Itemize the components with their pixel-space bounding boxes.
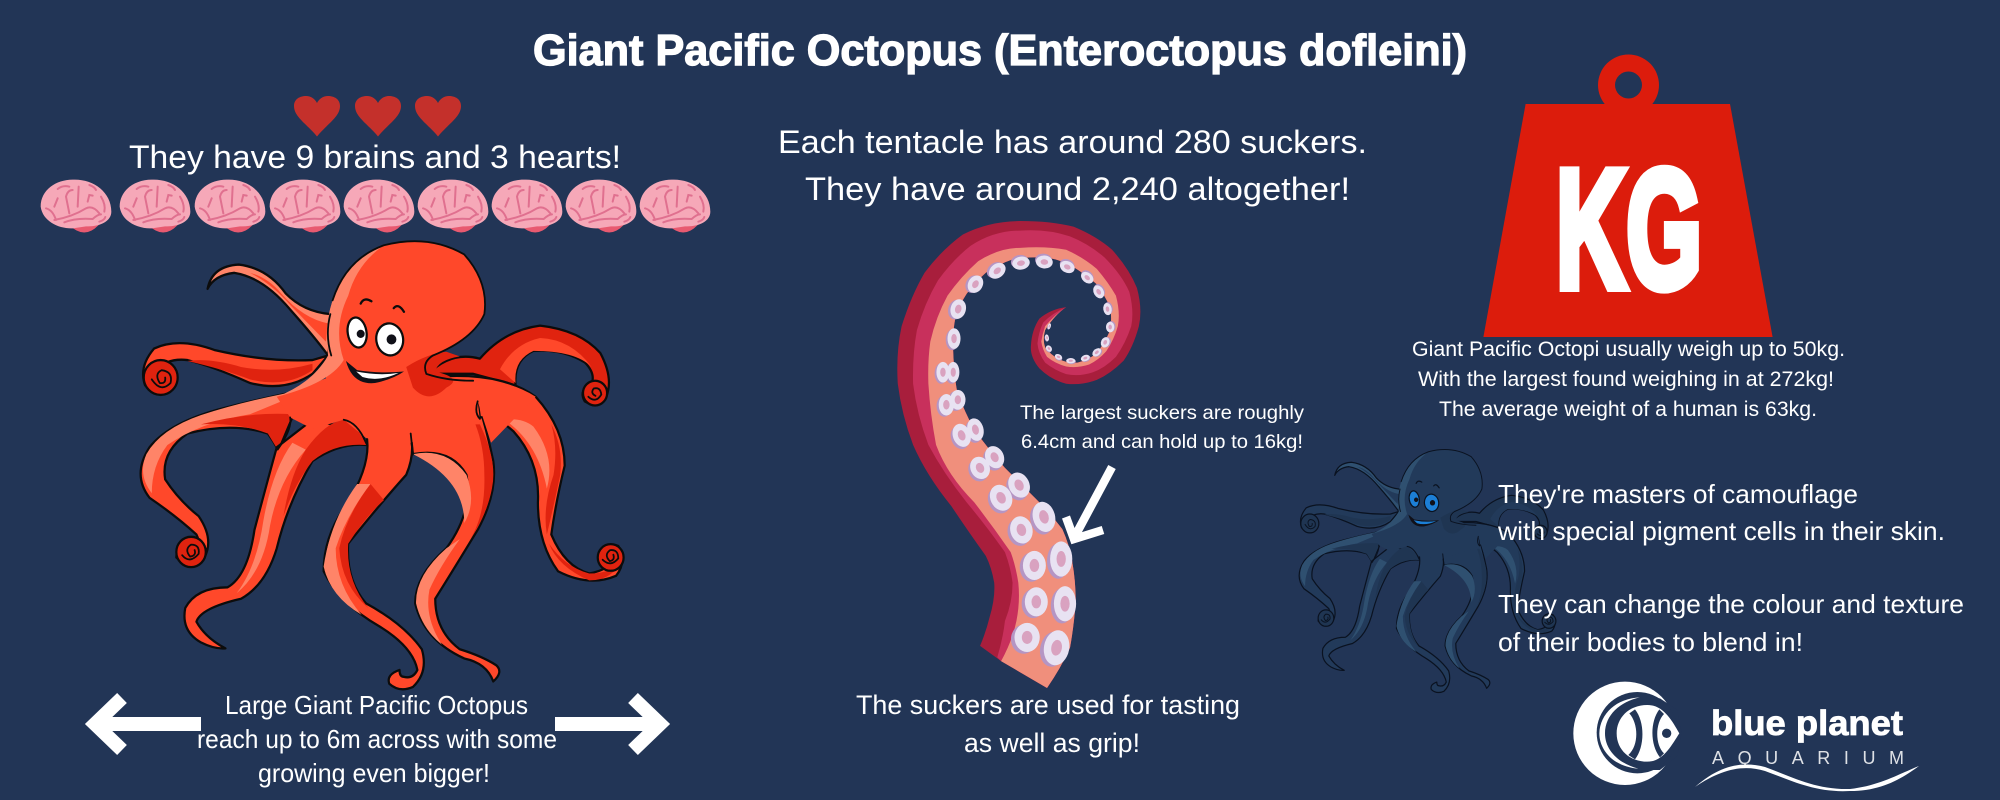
icon: nine brains (41, 180, 710, 232)
logo: blue planet aquarium (1573, 682, 1919, 791)
text: weight facts: The average weight of a human is 63kg. (1439, 398, 1817, 421)
text: brains and hearts fact: They have 9 brains and 3 hearts! (129, 139, 621, 175)
text: tasting fact: The suckers are used for tasting (856, 690, 1240, 720)
text: camouflage facts (1497, 479, 1964, 657)
title: Giant Pacific Octopus (Enteroctopus dofleini) (533, 26, 1467, 75)
icon: kg weight: KG (1556, 135, 1702, 323)
text: largest suckers fact: 6.4cm and can hold up to 16kg! (1021, 431, 1303, 453)
logo subtitle: AQUARIUM (1712, 748, 1904, 768)
text: size fact: growing even bigger! (258, 758, 490, 788)
text: size fact: reach up to 6m across with some (197, 724, 557, 754)
text: largest suckers fact (1020, 402, 1304, 453)
illustration: camouflaged octopus (1299, 450, 1556, 693)
icon: kg weight (1483, 54, 1773, 337)
text: camouflage facts: They're masters of camouflage (1498, 479, 1858, 509)
illustration: red octopus (141, 241, 624, 689)
illustration: tentacle (897, 221, 1140, 688)
arrow: to sucker (1066, 467, 1112, 539)
icon: three hearts (294, 96, 461, 136)
text: size fact (197, 690, 557, 788)
text: tasting fact (856, 690, 1240, 758)
panel: octopus size (95, 690, 660, 788)
text: sucker count (778, 124, 1367, 207)
arrow: left (95, 698, 201, 750)
text: sucker count: Each tentacle has around 280 suckers. (778, 124, 1367, 160)
text: largest suckers fact: The largest suckers are roughly (1020, 402, 1304, 424)
logo mark (1573, 682, 1682, 785)
logo wave (1695, 764, 1919, 791)
text: sucker count: They have around 2,240 altogether! (805, 171, 1350, 207)
text: tasting fact: as well as grip! (964, 728, 1140, 758)
text: weight facts: Giant Pacific Octopi usually weigh up to 50kg. (1412, 338, 1845, 361)
text: size fact: Large Giant Pacific Octopus (225, 690, 528, 720)
suckers (935, 253, 1116, 669)
text: weight facts (1412, 338, 1845, 421)
text: weight facts: With the largest found weighing in at 272kg! (1418, 368, 1834, 391)
text: camouflage facts: of their bodies to blend in! (1498, 627, 1803, 657)
text: camouflage facts: with special pigment cells in their skin. (1497, 516, 1945, 546)
logo wordmark: blue planet (1711, 704, 1903, 743)
panel: brains and hearts (41, 96, 710, 232)
text: camouflage facts: They can change the colour and texture (1498, 589, 1964, 619)
arrow: right (555, 698, 660, 750)
